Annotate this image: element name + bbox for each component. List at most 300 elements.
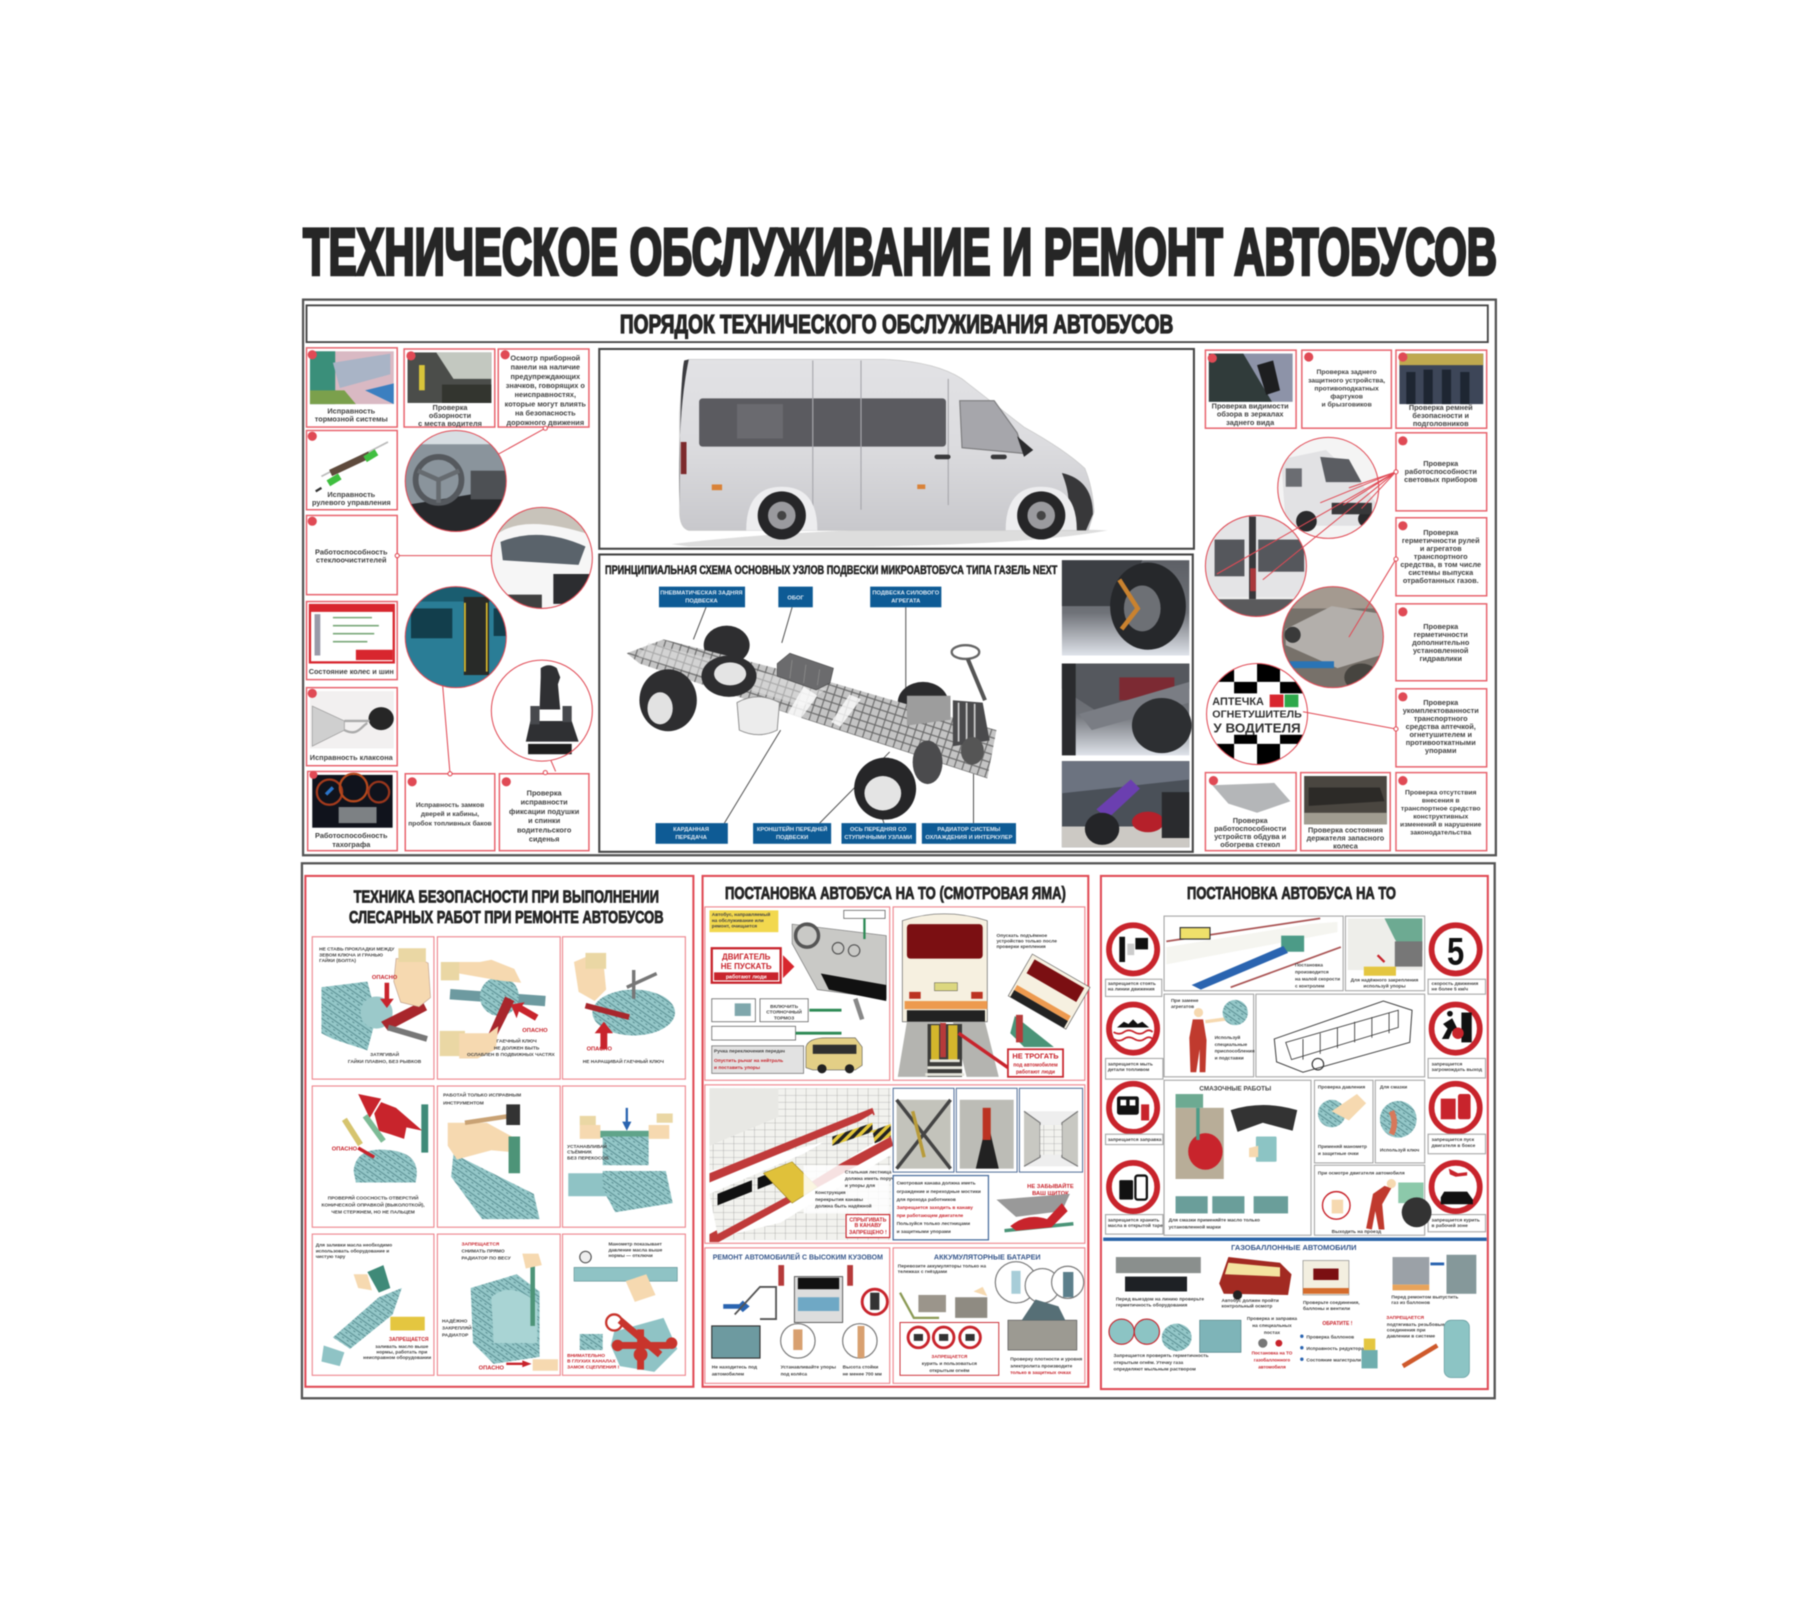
callout: mirrors: заднего вида bbox=[1226, 418, 1275, 427]
sign captions right bbox=[1428, 979, 1486, 1232]
blue divider bbox=[1103, 1238, 1487, 1241]
cell: bus over pit: под автомобилем bbox=[1013, 1061, 1058, 1068]
cell: wrench size: НЕ ДОЛЖЕН БЫТЬ bbox=[494, 1045, 540, 1051]
cell: pit layout: Пользуйся только лестницами bbox=[897, 1220, 970, 1227]
callout: horn: Исправность клаксона bbox=[310, 753, 394, 762]
section: gas vehicles: давлении в системе bbox=[1387, 1334, 1435, 1339]
cell: oil work: неисправном оборудовании bbox=[363, 1354, 431, 1361]
illustration: guarded drive-in bbox=[1164, 916, 1343, 991]
callout: hydraulics: герметичности bbox=[1414, 630, 1468, 639]
cell: pit layout: перекрытия канавы bbox=[815, 1198, 863, 1203]
callout: no modifications: законодательства bbox=[1410, 830, 1472, 837]
cell: puller: СЪЁМНИК bbox=[567, 1149, 592, 1156]
cell: batteries: ЗАПРЕЩАЕТСЯ bbox=[931, 1354, 967, 1359]
callout: instrument panel: на безопасность bbox=[515, 409, 576, 418]
photo circle: van rear bbox=[1203, 514, 1311, 622]
cell: engine diagram: В ГЛУХИХ КАНАЛАХ bbox=[567, 1359, 616, 1365]
photo circle: windshield van bbox=[488, 505, 597, 611]
cell: pit layout: для прохода работников bbox=[897, 1196, 956, 1203]
cell: do not use shims: НЕ СТАВЬ ПРОКЛАДКИ МЕЖДУ bbox=[319, 947, 395, 953]
callout: instrument panel: Осмотр приборной bbox=[510, 353, 580, 362]
illustration: bent mechanic at vehicle: Выходить на проезд bbox=[1332, 1229, 1381, 1235]
section: gas vehicles: баллоны и вентили bbox=[1303, 1305, 1350, 1312]
cell: pit layout: Стальная лестница bbox=[845, 1169, 892, 1175]
cell: batteries: только в защитных очках bbox=[1010, 1371, 1071, 1376]
callout: no modifications: Проверка отсутствия bbox=[1405, 789, 1477, 796]
cell: high-body vehicle repair: не менее 700 мм bbox=[843, 1371, 882, 1377]
callout: driver seat: Проверка bbox=[527, 789, 563, 798]
photo circle: first aid and extinguisher sign bbox=[1205, 662, 1309, 767]
cell: no extension: ОПАСНО bbox=[587, 1046, 612, 1052]
cell: do not use shims: ГАЙКИ ПЛАВНО, БЕЗ РЫВКОВ bbox=[348, 1057, 422, 1065]
cell: oil work: ЗАПРЕЩАЕТСЯ bbox=[389, 1337, 429, 1343]
cell: pit layout: при работающем двигателе bbox=[897, 1212, 964, 1219]
callout: blower: Проверка bbox=[1233, 816, 1269, 825]
illustration: mechanic with tool: приспособления bbox=[1215, 1048, 1255, 1055]
prohibition signs right bbox=[1432, 925, 1480, 1211]
prohibition signs right: 5 bbox=[1447, 930, 1464, 973]
section: gas vehicles: контрольный осмотр bbox=[1221, 1303, 1272, 1310]
callout: driver seat bbox=[499, 774, 589, 851]
cell: engine diagram: ВНИМАТЕЛЬНО bbox=[567, 1353, 605, 1359]
cell: good tools only bbox=[437, 1086, 560, 1227]
illustration: bent mechanic at vehicle: При осмотре двигателя автомобиля bbox=[1318, 1169, 1405, 1176]
cell: puller bbox=[563, 1086, 685, 1227]
heading: metalwork safety: СЛЕСАРНЫХ РАБОТ ПРИ РЕМОНТЕ АВТОБУСОВ bbox=[349, 907, 664, 927]
illustration: bus outline bbox=[1256, 994, 1425, 1077]
callout: driver seat: исправности bbox=[521, 798, 568, 807]
cell: oil work: Для заливки масла необходимо bbox=[316, 1242, 392, 1249]
cell: engine off instructions: ТОРМОЗ bbox=[774, 1015, 794, 1021]
callout: rear guard: защитного устройства, bbox=[1308, 376, 1385, 384]
sign captions right: запрещается bbox=[1432, 1062, 1462, 1067]
cell: engine diagram: Манометр показывает bbox=[608, 1242, 662, 1248]
cell: oil work bbox=[312, 1234, 434, 1375]
cell: pit layout: ЗАПРЕЩЕНО ! bbox=[849, 1230, 887, 1236]
section: gas vehicles: герметичность оборудования bbox=[1116, 1301, 1188, 1308]
callout: no modifications: конструктивных bbox=[1413, 814, 1468, 821]
illustration: wheel chocks bbox=[1345, 916, 1425, 991]
section: gas vehicles: ОБРАТИТЕ ! bbox=[1322, 1321, 1353, 1327]
callout: steering: рулевого управления bbox=[312, 498, 391, 507]
sign captions right: в рабочей зоне bbox=[1432, 1222, 1468, 1229]
sign captions right: загромождать выход bbox=[1432, 1068, 1482, 1073]
blue labels: ПОДВЕСКА СИЛОВОГО bbox=[872, 591, 940, 597]
callout: hydraulics: установленной bbox=[1413, 646, 1468, 655]
cell: do not use shims: ОПАСНО bbox=[372, 975, 398, 981]
section: gas vehicles: Состояние магистрали bbox=[1306, 1358, 1361, 1364]
ground shadow bbox=[672, 528, 1108, 546]
cell: bus over pit: Опускать подъёмное bbox=[996, 933, 1047, 939]
section: gas vehicles: подтягивать резьбовые bbox=[1387, 1321, 1445, 1328]
cell: oil work: заливать масло выше bbox=[375, 1345, 429, 1350]
blue labels: КРОНШТЕЙН ПЕРЕДНЕЙ bbox=[757, 825, 827, 833]
cell: engine off instructions: работают люди bbox=[726, 974, 767, 981]
van wheels bbox=[758, 491, 1065, 540]
callout: blower bbox=[1205, 773, 1296, 851]
cell: pit layout: В КАНАВУ bbox=[855, 1223, 882, 1229]
callout: lights bbox=[1396, 433, 1487, 511]
illustration: lubrication work: СМАЗОЧНЫЕ РАБОТЫ bbox=[1199, 1086, 1271, 1093]
panel: inspection pit bbox=[703, 876, 1090, 1387]
callout: tightness: системы выпуска bbox=[1408, 568, 1474, 577]
cell: engine off instructions: СТОЯНОЧНЫЙ bbox=[766, 1008, 802, 1016]
callout: tightness: средства, в том числе bbox=[1400, 560, 1481, 569]
callout: wipers bbox=[307, 515, 397, 595]
poster bbox=[300, 226, 1498, 1400]
illustration: adjustment work right: Для смазки bbox=[1380, 1084, 1407, 1090]
section: gas vehicles: Перед ремонтом выпустить bbox=[1391, 1294, 1458, 1300]
callout: tightness: герметичности рулей bbox=[1402, 536, 1480, 545]
callout: tightness bbox=[1396, 518, 1487, 596]
blue labels: РАДИАТОР СИСТЕМЫ bbox=[937, 827, 1001, 833]
cell: pit layout: должна иметь поручни bbox=[845, 1177, 900, 1182]
callout: instrument panel: неисправностях, bbox=[515, 390, 576, 399]
callout: spare wheel holder: Проверка состояния bbox=[1308, 825, 1383, 834]
illustration: adjustment work left: Проверка давления bbox=[1318, 1084, 1365, 1090]
cell: do not use shims: ЗЕВОМ КЛЮЧА И ГРАНЬЮ bbox=[319, 952, 383, 958]
illustration: lubrication work: установленной марки bbox=[1169, 1223, 1221, 1230]
cell: radiator hoist: ОПАСНО bbox=[479, 1366, 505, 1372]
cell: engine diagram: ЗАМОК СЦЕПЛЕНИЯ ! bbox=[567, 1364, 620, 1370]
callout: spare wheel holder bbox=[1301, 773, 1390, 851]
suspension photo 1 bbox=[1062, 560, 1189, 656]
blue labels: ОХЛАЖДЕНИЯ И ИНТЕРКУЛЕР bbox=[925, 835, 1013, 841]
callout: hydraulics: Проверка bbox=[1423, 622, 1459, 631]
cell: radiator hoist: РАДИАТОР bbox=[442, 1332, 469, 1338]
leader lines left bbox=[395, 426, 556, 776]
sign captions left: масла в открытой таре bbox=[1108, 1222, 1163, 1229]
cell: pit layout: Смотровая канава должна иметь bbox=[897, 1181, 976, 1187]
cell: engine off instructions bbox=[705, 907, 890, 1080]
callout: lights: Проверка bbox=[1423, 459, 1459, 468]
callout: instrument panel bbox=[498, 349, 589, 427]
callout: rear guard bbox=[1302, 350, 1391, 428]
callout: first aid kit: противооткатными bbox=[1406, 738, 1476, 747]
illustration: lubrication work bbox=[1164, 1080, 1311, 1235]
illustration: adjustment work left: и защитные очки bbox=[1318, 1152, 1359, 1157]
illustration: guarded drive-in: на малой скорости bbox=[1295, 975, 1340, 982]
callout: driver seat: и спинки bbox=[528, 816, 560, 825]
illustration: wheel chocks: используй упоры bbox=[1363, 982, 1406, 989]
callout: driver view: обзорности bbox=[429, 411, 471, 420]
cell: high-body vehicle repair: автомобилем bbox=[712, 1370, 744, 1377]
callout: tachograph bbox=[308, 771, 397, 851]
illustration: mechanic with tool: Используй bbox=[1215, 1034, 1240, 1041]
callout: seat belts: Проверка ремней bbox=[1409, 403, 1473, 412]
cell: batteries: Перевозите аккумуляторы только на bbox=[898, 1263, 986, 1269]
panel: maintenance order bbox=[303, 300, 1496, 855]
cell: engine off instructions: ВКЛЮЧИТЬ bbox=[770, 1004, 799, 1010]
cell: radiator hoist bbox=[437, 1234, 560, 1375]
callout: wipers: Работоспособность bbox=[315, 547, 388, 556]
heading: inspection pit: ПОСТАНОВКА АВТОБУСА НА ТО (СМОТРОВАЯ ЯМА) bbox=[725, 883, 1066, 903]
blue labels: КАРДАННАЯ bbox=[673, 827, 709, 833]
callout: mirrors: Проверка видимости bbox=[1212, 402, 1289, 411]
cell: pit layout: НЕ ЗАБЫВАЙТЕ bbox=[1027, 1182, 1074, 1190]
cell: good tools only: ИНСТРУМЕНТОМ bbox=[443, 1100, 484, 1106]
callout: driver view: Проверка bbox=[433, 403, 468, 412]
cell: engine off instructions: Опустить рычаг на нейтраль bbox=[714, 1057, 783, 1064]
illustration: guarded drive-in: производится bbox=[1295, 971, 1329, 976]
cell: hand injury: ЧЕМ СТЕРЖНЕМ, НО НЕ ПАЛЬЦЕМ bbox=[331, 1209, 415, 1215]
cell: high-body vehicle repair bbox=[705, 1248, 890, 1383]
sign captions right: не более 5 км/ч bbox=[1432, 986, 1468, 993]
callout: door locks: дверей и кабины, bbox=[421, 810, 479, 818]
cell: do not use shims: ГАЙКИ (БОЛТА) bbox=[319, 956, 356, 964]
illustration: mechanic with tool bbox=[1164, 994, 1255, 1077]
cell: pit layout: ВАШ ЩИТОК bbox=[1032, 1191, 1069, 1197]
illustration: lubrication work: Для смазки применяйте масло только bbox=[1169, 1216, 1260, 1223]
cell: radiator hoist: ЗАПРЕЩАЕТСЯ bbox=[461, 1242, 500, 1248]
heading: metalwork safety bbox=[349, 886, 664, 927]
callout: mirrors: обзора в зеркалах bbox=[1217, 410, 1284, 419]
illustration: mechanic with tool: агрегатов bbox=[1171, 1005, 1194, 1010]
sign captions right: двигателя в боксе bbox=[1432, 1142, 1476, 1149]
cell: radiator hoist: НАДЁЖНО bbox=[442, 1317, 468, 1324]
cell: puller: БЕЗ ПЕРЕКОСОВ bbox=[567, 1155, 609, 1161]
cell: batteries bbox=[893, 1248, 1085, 1383]
callout: instrument panel: дорожного движения bbox=[507, 418, 584, 427]
heading: metalwork safety: ТЕХНИКА БЕЗОПАСНОСТИ ПРИ ВЫПОЛНЕНИИ bbox=[354, 886, 659, 906]
cell: do not use shims: ЗАТЯГИВАЙ bbox=[370, 1050, 400, 1058]
illustration: mechanic with tool: и подставки bbox=[1215, 1057, 1244, 1062]
van photo panel bbox=[599, 349, 1194, 549]
cell: bus over pit: устройство только после bbox=[996, 938, 1057, 945]
cell: oil work: чистую тару bbox=[316, 1255, 346, 1260]
chassis scheme panel bbox=[599, 554, 1193, 852]
illustration: adjustment work left: Применяй манометр bbox=[1318, 1143, 1367, 1150]
callout: driver view: с места водителя bbox=[418, 419, 482, 428]
cell: engine off instructions: на обслуживание или bbox=[712, 917, 764, 924]
callout: rear guard: Проверка заднего bbox=[1317, 369, 1377, 376]
cell: hand injury: КОНИЧЕСКОЙ ОПРАВКОЙ (ВЫКОЛОТКОЙ), bbox=[322, 1201, 425, 1209]
blue labels bbox=[656, 587, 1016, 844]
cell: pit layout: и защитными упорами bbox=[897, 1230, 951, 1235]
blue labels: ПНЕВМАТИЧЕСКАЯ ЗАДНЯЯ bbox=[660, 591, 743, 597]
callout: tightness: транспортного bbox=[1414, 552, 1468, 561]
cell: pit layout: Запрещается заходить в канаву bbox=[897, 1205, 973, 1211]
callout: tightness: и агрегатов bbox=[1420, 544, 1462, 553]
sign captions right: запрещается курить bbox=[1432, 1218, 1480, 1223]
cell: engine off instructions: и поставить упоры bbox=[714, 1066, 760, 1071]
callout: tachograph: Работоспособность bbox=[315, 831, 388, 840]
callout: instrument panel: предупреждающих bbox=[510, 372, 581, 381]
callout: door locks: пробок топливных баков bbox=[408, 819, 492, 827]
callout: door locks bbox=[405, 774, 495, 851]
cell: high-body vehicle repair: Высота стойки bbox=[843, 1363, 878, 1370]
cell: bus over pit: проверки крепления bbox=[996, 945, 1046, 950]
callout: mirrors bbox=[1205, 350, 1296, 428]
suspension photo 3 bbox=[1062, 761, 1189, 847]
section: gas vehicles: Перед выездом на линию проверьте bbox=[1116, 1297, 1204, 1303]
sign captions right: скорость движения bbox=[1432, 982, 1479, 987]
section: gas vehicles: Проверка и заправка bbox=[1247, 1316, 1297, 1322]
callout: spare wheel holder: колеса bbox=[1333, 841, 1359, 850]
photo circle: first aid and extinguisher sign: ОГНЕТУШИТЕЛЬ bbox=[1212, 710, 1302, 721]
chassis drawing bbox=[627, 607, 996, 823]
callout: first aid kit: упорами bbox=[1425, 746, 1456, 755]
section: gas vehicles: постах bbox=[1264, 1331, 1280, 1336]
cell: batteries: электролита производите bbox=[1010, 1364, 1073, 1369]
photo circle: exhaust bbox=[1280, 585, 1388, 691]
section: gas vehicles: Постановка на ТО bbox=[1252, 1351, 1293, 1356]
callout: first aid kit: транспортного bbox=[1414, 714, 1468, 723]
callout: first aid kit: средства аптечкой, bbox=[1406, 722, 1476, 731]
panel: lower section bbox=[302, 863, 1495, 1398]
cell: pit layout: должна быть надёжной bbox=[815, 1203, 872, 1210]
section: gas vehicles: на специальных bbox=[1252, 1324, 1292, 1329]
callout: brake system bbox=[307, 348, 397, 427]
callout: driver seat: фиксации подушки bbox=[509, 807, 579, 816]
cell: bus over pit: работают люди bbox=[1016, 1068, 1055, 1075]
illustration: bent mechanic at vehicle bbox=[1314, 1165, 1432, 1235]
heading: service setup: ПОСТАНОВКА АВТОБУСА НА ТО bbox=[1187, 883, 1396, 903]
callout: brake system: тормозной системы bbox=[315, 414, 388, 423]
illustration: adjustment work right: Используй ключ bbox=[1380, 1146, 1419, 1153]
callout: wheels and tires: Состояние колес и шин bbox=[309, 667, 394, 676]
callout: driver view bbox=[404, 349, 495, 428]
cell: high-body vehicle repair: Устанавливайте упоры bbox=[781, 1363, 836, 1370]
cell: do not use shims bbox=[312, 937, 434, 1079]
photo circle: driver seat bbox=[491, 660, 592, 761]
cell: batteries: тележках с гнёздами bbox=[898, 1269, 947, 1275]
callout: no modifications bbox=[1396, 773, 1487, 851]
cell: radiator hoist: РАДИАТОР ПО ВЕСУ bbox=[461, 1255, 512, 1261]
cell: high-body vehicle repair: под колёса bbox=[781, 1371, 807, 1377]
sign captions left: запрещается мыть bbox=[1108, 1062, 1153, 1067]
section: gas vehicles: автомобиля bbox=[1258, 1363, 1286, 1369]
callout: hydraulics bbox=[1396, 604, 1487, 681]
callout: seat belts: подголовников bbox=[1413, 419, 1469, 428]
callout: first aid kit: укомплектованности bbox=[1403, 706, 1479, 715]
leader lines right bbox=[1217, 470, 1398, 731]
suspension photo 2 bbox=[1062, 664, 1192, 755]
section: gas vehicles: Запрещается проверять герметичность bbox=[1114, 1353, 1209, 1359]
panel: metalwork safety bbox=[305, 876, 693, 1387]
blue labels: АГРЕГАТА bbox=[891, 599, 920, 605]
cell: engine off instructions: ДВИГАТЕЛЬ bbox=[722, 953, 771, 962]
callout: lights: работоспособности bbox=[1405, 467, 1477, 476]
section: gas vehicles: ГАЗОБАЛЛОННЫЕ АВТОМОБИЛИ bbox=[1231, 1243, 1356, 1252]
callout: rear guard: и брызговиков bbox=[1321, 400, 1372, 408]
panel: service setup bbox=[1101, 876, 1488, 1389]
sign captions left: запрещается хранить bbox=[1108, 1218, 1159, 1223]
sign captions right: запрещается пуск bbox=[1432, 1138, 1475, 1143]
illustration: mechanic with tool: специальные bbox=[1215, 1043, 1247, 1048]
cell: oil work: использовать оборудование и bbox=[316, 1247, 389, 1254]
blue labels: ПОДВЕСКИ bbox=[776, 835, 808, 841]
cell: batteries: АККУМУЛЯТОРНЫЕ БАТАРЕИ bbox=[934, 1252, 1041, 1261]
callout: hydraulics: дополнительно bbox=[1412, 638, 1470, 647]
callout: driver seat: сиденья bbox=[529, 834, 559, 843]
cell: pit layout bbox=[705, 1085, 1085, 1243]
cell: wrench size: ГАЕЧНЫЙ КЛЮЧ bbox=[497, 1036, 537, 1044]
callout: first aid kit: огнетушителем и bbox=[1409, 730, 1472, 739]
cell: pit layout: и упоры для bbox=[845, 1184, 875, 1189]
callout: instrument panel: значков, говорящих о bbox=[506, 381, 585, 390]
callout: brake system: Исправность bbox=[327, 406, 376, 415]
cell: oil work: нормы, работать при bbox=[376, 1348, 427, 1355]
sign captions left: запрещается заправка bbox=[1108, 1138, 1162, 1143]
callout: seat belts bbox=[1396, 350, 1487, 428]
cell: batteries: Проверку плотности и уровня bbox=[1010, 1356, 1082, 1362]
cell: no extension: НЕ НАРАЩИВАЙ ГАЕЧНЫЙ КЛЮЧ bbox=[583, 1057, 665, 1065]
cell: engine off instructions: Ручка переключения передач bbox=[714, 1049, 785, 1055]
callout: door locks: Исправность замков bbox=[416, 802, 484, 809]
cell: engine off instructions: Автобус, направляемый bbox=[712, 911, 770, 918]
callout: hydraulics: гидравлики bbox=[1419, 654, 1462, 663]
illustration: adjustment work right bbox=[1375, 1080, 1425, 1163]
callout: horn bbox=[307, 688, 397, 766]
callout: blower: обогрева стекол bbox=[1220, 840, 1280, 849]
callout: blower: устройств обдува и bbox=[1214, 832, 1286, 841]
section: gas vehicles: определяют мыльным раствором bbox=[1114, 1368, 1196, 1373]
sign captions left: детали топливом bbox=[1108, 1068, 1150, 1073]
callout: wipers: стеклоочистителей bbox=[316, 556, 387, 565]
cell: bus over pit bbox=[893, 907, 1090, 1080]
cell: engine diagram: нормы — отключи bbox=[608, 1254, 653, 1259]
callout: first aid kit: Проверка bbox=[1423, 698, 1459, 707]
cell: high-body vehicle repair: РЕМОНТ АВТОМОБИЛЕЙ С ВЫСОКИМ КУЗОВОМ bbox=[713, 1252, 883, 1261]
callout: lights: световых приборов bbox=[1404, 475, 1478, 484]
van body bbox=[679, 359, 1094, 530]
callout: tightness: Проверка bbox=[1423, 528, 1459, 537]
callout: no modifications: внесения в bbox=[1422, 797, 1460, 804]
cell: batteries: курить и пользоваться bbox=[922, 1362, 977, 1367]
sign captions left: запрещается стоять bbox=[1108, 982, 1156, 987]
heading: maintenance order bbox=[307, 305, 1488, 342]
callout: seat belts: безопасности и bbox=[1412, 411, 1469, 420]
cell: no extension bbox=[563, 937, 685, 1079]
photo circle: first aid and extinguisher sign: АПТЕЧКА bbox=[1212, 696, 1264, 708]
cell: wrench size: ОСЛАБЛЕН В ПОДВИЖНЫХ ЧАСТЯХ bbox=[467, 1052, 556, 1058]
section: gas vehicles: газ из баллонов bbox=[1391, 1299, 1430, 1306]
cell: pit layout: СПРЫГИВАТЬ bbox=[849, 1217, 887, 1223]
cell: bus over pit: НЕ ТРОГАТЬ bbox=[1012, 1051, 1059, 1060]
section: gas vehicles: Проверка баллонов bbox=[1306, 1334, 1354, 1341]
callout: instrument panel: панели на наличие bbox=[511, 363, 580, 372]
cell: engine off instructions: ремонт, очищается bbox=[712, 925, 757, 930]
photo circle: first aid and extinguisher sign: У ВОДИТЕЛЯ bbox=[1213, 721, 1301, 735]
cell: batteries: открытым огнём bbox=[929, 1368, 970, 1374]
callout: rear guard: фартуков bbox=[1330, 393, 1363, 400]
illustration: guarded drive-in: с контролем bbox=[1295, 984, 1325, 989]
cell: hand injury: ОПАСНО bbox=[332, 1146, 358, 1152]
section: gas vehicles: Проверьте соединения, bbox=[1303, 1300, 1360, 1306]
illustration: wheel chocks: Для надёжного закрепления bbox=[1351, 978, 1419, 984]
illustration: mechanic with tool: При замене bbox=[1171, 998, 1199, 1004]
callout: blower: работоспособности bbox=[1214, 824, 1286, 833]
blue labels: ОБОГ bbox=[787, 595, 804, 601]
section: gas vehicles: Автобус должен пройти bbox=[1221, 1297, 1279, 1304]
callout: driver seat: водительского bbox=[517, 825, 572, 834]
illustration: guarded drive-in: Постановка bbox=[1295, 963, 1323, 969]
blue labels: СТУПИЧНЫМИ УЗЛАМИ bbox=[844, 835, 912, 841]
section: gas vehicles: открытым огнём. Утечку газа bbox=[1114, 1360, 1184, 1366]
cell: pit layout: ограждение и переходные мостики bbox=[897, 1190, 981, 1195]
section: gas vehicles: Исправность редуктора bbox=[1306, 1346, 1364, 1352]
section: gas vehicles bbox=[1109, 1243, 1476, 1378]
callout: instrument panel: которые могут влиять bbox=[505, 399, 586, 408]
cell: good tools only: РАБОТАЙ ТОЛЬКО ИСПРАВНЫМ bbox=[443, 1090, 521, 1098]
section: gas vehicles: газобаллонного bbox=[1254, 1357, 1290, 1363]
callout: tachograph: тахографа bbox=[332, 840, 371, 849]
cell: wrench size: ОПАСНО bbox=[522, 1028, 548, 1034]
heading: maintenance order: ПОРЯДОК ТЕХНИЧЕСКОГО ОБСЛУЖИВАНИЯ АВТОБУСОВ bbox=[620, 311, 1173, 339]
cell: hand injury bbox=[312, 1086, 434, 1227]
cell: engine diagram bbox=[563, 1234, 685, 1375]
